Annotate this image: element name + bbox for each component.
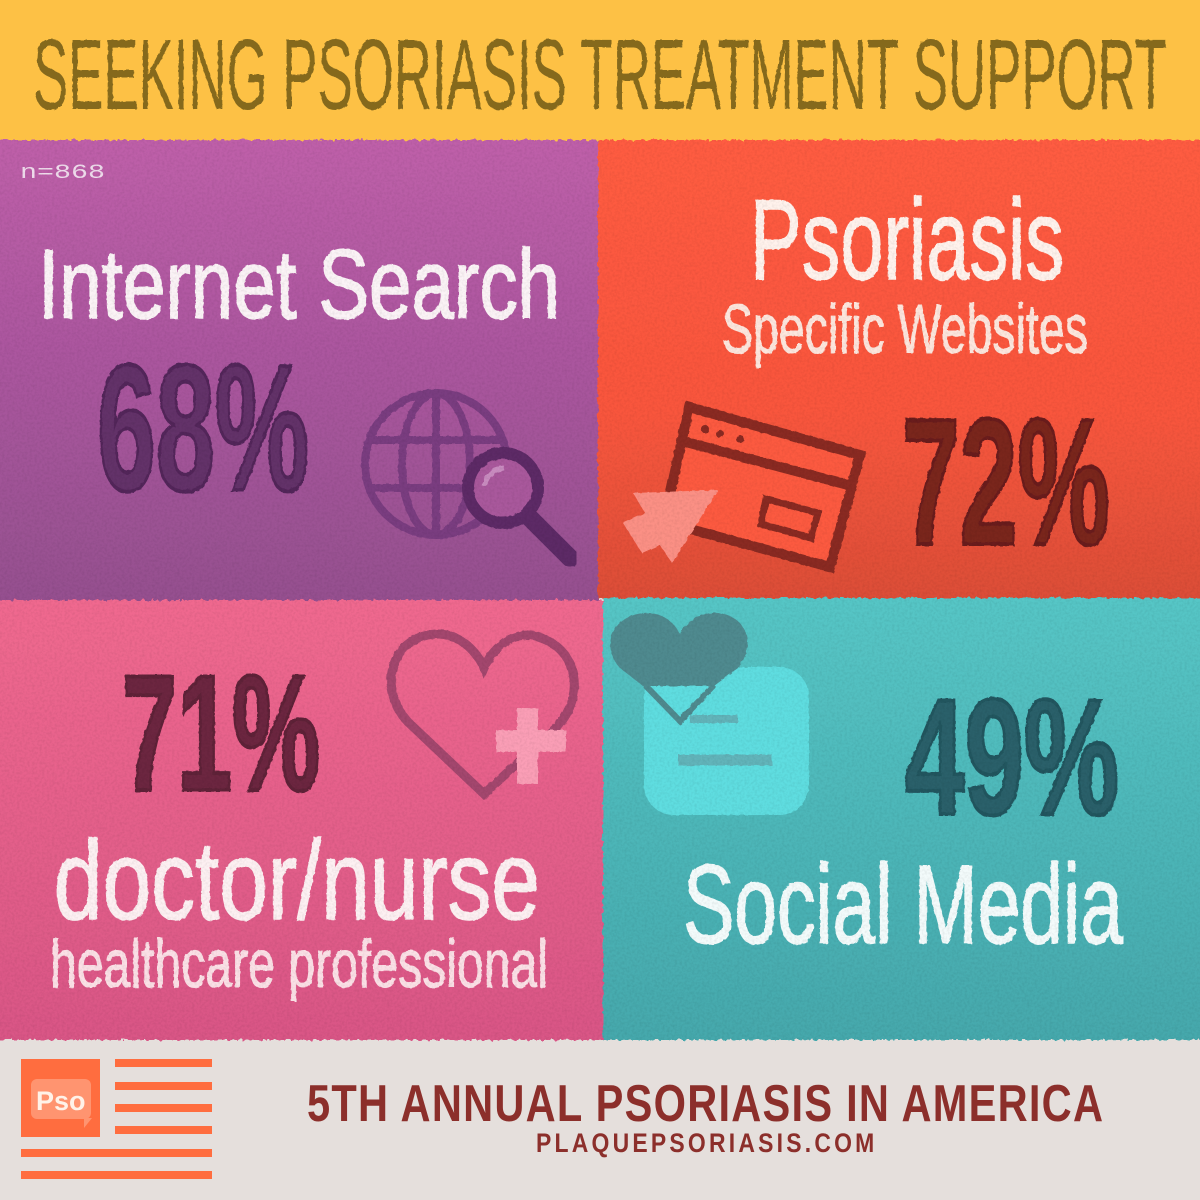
icon: globe with magnifier bbox=[365, 393, 570, 558]
stat: 68%: 68% bbox=[97, 328, 309, 529]
subheading: healthcare professional: healthcare professional bbox=[50, 926, 548, 1002]
logo: flag with Pso bubble bbox=[21, 1059, 212, 1179]
footer url: PLAQUEPSORIASIS.COM bbox=[536, 1128, 874, 1158]
panel: social media bbox=[603, 598, 1200, 1045]
icon: chat bubble with heart bbox=[610, 613, 809, 815]
footer bbox=[0, 1040, 1200, 1200]
sample size note: n=868 bbox=[20, 162, 105, 185]
heading: internet search: Internet Search bbox=[38, 229, 560, 339]
icon: browser window with cursor bbox=[623, 407, 860, 567]
footer headline: 5TH ANNUAL PSORIASIS IN AMERICA bbox=[307, 1074, 1103, 1132]
panel: doctor nurse bbox=[0, 600, 604, 1045]
panel: psoriasis specific websites bbox=[598, 130, 1200, 598]
stat: 71%: 71% bbox=[122, 641, 320, 825]
heading: psoriasis: Psoriasis bbox=[750, 177, 1064, 304]
logo: flag with Pso bubble: Pso bbox=[36, 1086, 86, 1116]
panel: internet search bbox=[0, 130, 599, 605]
texture overlay bbox=[0, 140, 1200, 1040]
title banner bbox=[0, 0, 1200, 140]
icon: heart with plus bbox=[391, 634, 574, 794]
heading: doctor/nurse: doctor/nurse bbox=[54, 818, 540, 943]
